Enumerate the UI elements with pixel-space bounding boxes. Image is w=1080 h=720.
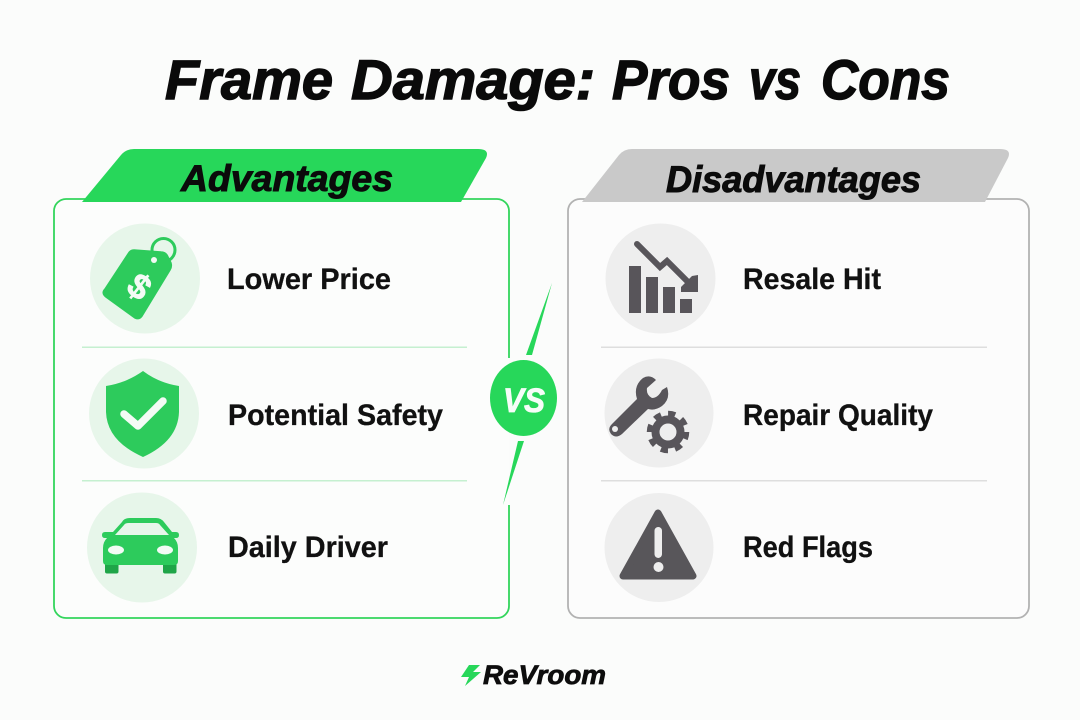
icon: warning triangle <box>623 513 693 576</box>
title: Damage: <box>351 48 595 111</box>
title: Pros <box>612 48 730 111</box>
panel: advantages <box>54 149 509 618</box>
vs badge <box>490 283 557 505</box>
title: Cons <box>821 48 950 111</box>
heading tab: advantages <box>82 149 487 202</box>
label: daily driver: Daily Driver <box>228 531 388 564</box>
icon: price tag <box>103 238 175 319</box>
heading tab: disadvantages <box>582 149 1009 202</box>
title: Frame <box>165 48 333 111</box>
heading tab: advantages: Advantages <box>180 158 393 199</box>
icon: falling bar chart <box>629 244 698 313</box>
icon: lightning bolt <box>461 665 481 686</box>
label: repair quality: Repair Quality <box>743 399 933 432</box>
icon: price tag: $ <box>119 266 159 308</box>
logo: ReVroom: ReVroom <box>483 660 606 690</box>
panel: disadvantages <box>568 149 1029 618</box>
label: resale hit: Resale Hit <box>743 263 881 296</box>
icon: shield with check <box>106 371 179 457</box>
label: red flags: Red Flags <box>743 531 873 564</box>
icon: car <box>102 518 179 574</box>
vs badge: VS <box>503 382 545 420</box>
item: potential safety <box>89 358 443 468</box>
item: daily driver <box>87 492 388 602</box>
item: red flags <box>604 493 873 602</box>
title: vs <box>749 48 801 111</box>
icon: wrench and gear <box>609 376 686 450</box>
panel frame: disadvantages <box>568 199 1029 618</box>
item: resale hit <box>606 224 881 334</box>
item: repair quality <box>604 358 933 468</box>
panel frame: advantages <box>54 199 509 618</box>
heading tab: disadvantages: Disadvantages <box>666 159 921 200</box>
item: lower price <box>90 224 391 334</box>
title <box>165 48 950 111</box>
label: lower price: Lower Price <box>227 263 391 296</box>
label: potential safety: Potential Safety <box>228 399 443 432</box>
